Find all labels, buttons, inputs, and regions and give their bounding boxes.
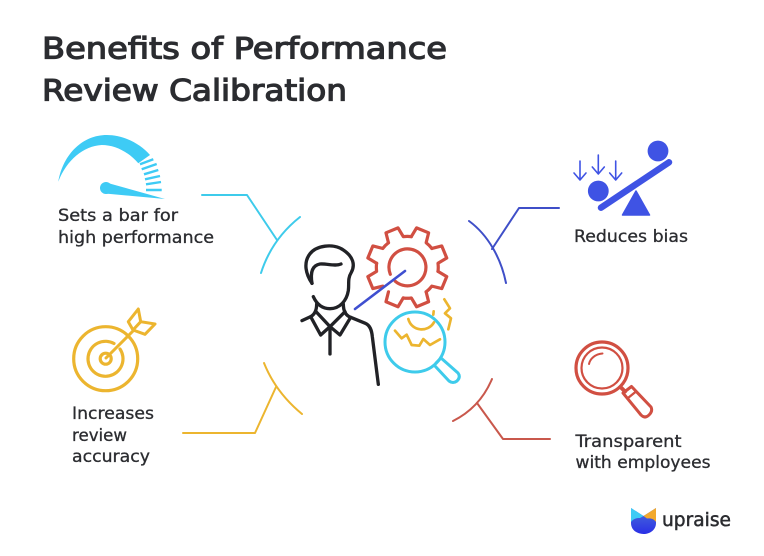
icon: seesaw with balls and arrows bbox=[574, 141, 669, 215]
panel: transparent with employees bbox=[574, 342, 710, 472]
label: transparent: Transparent bbox=[574, 432, 682, 451]
icon: person outline bbox=[302, 246, 378, 384]
icon: speedometer gauge bbox=[58, 135, 165, 199]
label: high performance: high performance bbox=[58, 228, 214, 247]
icon: red magnifying glass bbox=[576, 342, 652, 417]
label: sets a bar: Sets a bar for bbox=[58, 206, 178, 225]
label: review: review bbox=[72, 426, 127, 445]
connector: cyan bbox=[202, 195, 300, 273]
icon: target with arrow bbox=[74, 309, 155, 391]
title bbox=[42, 32, 447, 108]
title: Benefits of Performance bbox=[42, 32, 447, 66]
wordmark: upraise bbox=[662, 509, 731, 531]
icon: gear bbox=[364, 224, 450, 310]
icon: upraise mark bbox=[631, 508, 656, 534]
icon: gear fragments in lens bbox=[395, 299, 451, 346]
logo: upraise bbox=[631, 508, 731, 534]
label: increases: Increases bbox=[72, 404, 154, 423]
central illustration bbox=[302, 224, 459, 384]
icon: magnifier bbox=[385, 312, 459, 382]
panel: sets a bar for high performance bbox=[58, 135, 214, 247]
title: Review Calibration bbox=[42, 74, 347, 108]
label: reduces bias: Reduces bias bbox=[574, 227, 688, 246]
connector: indigo bbox=[469, 208, 559, 283]
connector: red bbox=[453, 379, 550, 439]
label: accuracy: accuracy bbox=[72, 447, 150, 466]
line: blue pointer bbox=[355, 271, 405, 309]
panel: increases review accuracy bbox=[72, 309, 155, 466]
label: with employees: with employees bbox=[576, 453, 710, 472]
connector: yellow bbox=[183, 363, 302, 433]
panel: reduces bias bbox=[574, 141, 688, 246]
